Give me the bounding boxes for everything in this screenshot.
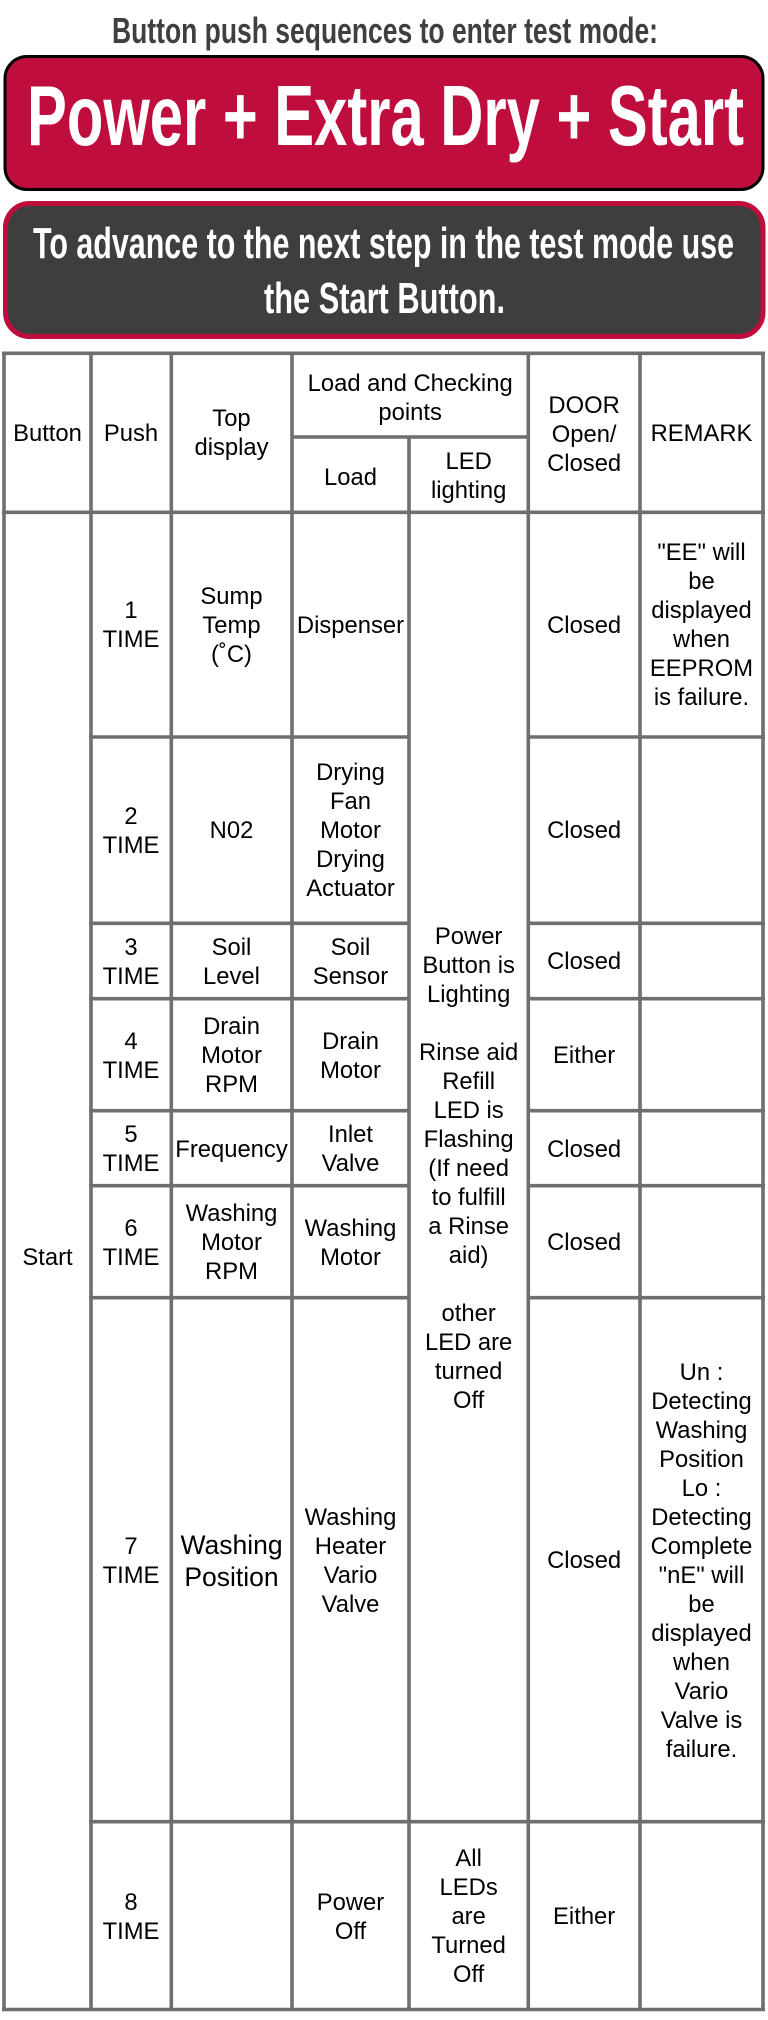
remark 7: Washing bbox=[656, 1416, 747, 1444]
load 7: Heater bbox=[315, 1532, 386, 1560]
top display 4: Motor bbox=[201, 1042, 262, 1069]
led lighting cell: steps 1 to 7: aid) bbox=[449, 1242, 488, 1269]
remark 7: Valve is bbox=[661, 1706, 742, 1734]
led lighting 8 bbox=[431, 1845, 506, 1988]
load 2: Fan bbox=[330, 788, 371, 815]
load 8: Power bbox=[317, 1888, 384, 1916]
load 6: Motor bbox=[320, 1244, 381, 1270]
load 2: Drying bbox=[316, 846, 385, 873]
led lighting 8: Off bbox=[453, 1961, 484, 1988]
remark 7: when bbox=[673, 1648, 730, 1676]
row 5 bbox=[103, 1121, 621, 1177]
led lighting 8: are bbox=[451, 1903, 486, 1930]
remark 1: is failure. bbox=[654, 684, 749, 711]
push 6: TIME bbox=[103, 1244, 159, 1270]
led lighting cell: steps 1 to 7 bbox=[419, 923, 518, 1414]
load 5 bbox=[322, 1121, 379, 1177]
row 6 bbox=[103, 1200, 621, 1285]
push 4: TIME bbox=[103, 1056, 159, 1084]
remark 7: Un : bbox=[680, 1358, 723, 1386]
led lighting cell: steps 1 to 7: (If need bbox=[428, 1155, 509, 1182]
led lighting 8: LEDs bbox=[440, 1874, 498, 1901]
header: door open/closed: Closed bbox=[547, 450, 621, 476]
push 3 bbox=[103, 934, 159, 990]
button cell: start: Start bbox=[22, 1244, 73, 1271]
header: door open/closed: Open/ bbox=[552, 420, 617, 448]
header: top display: Top bbox=[212, 405, 251, 432]
load 2 bbox=[306, 759, 395, 902]
header: top display: display bbox=[194, 434, 269, 461]
push 2 bbox=[103, 802, 159, 858]
top display 4: RPM bbox=[205, 1071, 258, 1098]
load 1: Dispenser bbox=[297, 612, 404, 638]
header: led lighting: LED bbox=[446, 448, 492, 475]
push 3: TIME bbox=[103, 962, 159, 990]
remark 1: be bbox=[688, 568, 715, 595]
door 4: Either bbox=[553, 1042, 615, 1069]
led lighting cell: steps 1 to 7: Rinse aid bbox=[419, 1039, 518, 1066]
remark 7: "nE" will bbox=[659, 1562, 744, 1588]
remark 7: Detecting bbox=[651, 1388, 752, 1414]
header: load and checking points: points bbox=[378, 398, 442, 426]
row 3 bbox=[103, 934, 621, 990]
led lighting 8: Turned bbox=[431, 1932, 506, 1959]
header: remark: REMARK bbox=[651, 420, 752, 446]
push 6 bbox=[103, 1214, 159, 1270]
led lighting 8: All bbox=[455, 1845, 482, 1872]
push 1 bbox=[103, 597, 159, 653]
remark 1 bbox=[650, 539, 753, 711]
push 7 bbox=[103, 1532, 159, 1588]
row 8 bbox=[103, 1845, 615, 1988]
push 5: TIME bbox=[103, 1150, 159, 1177]
remark 1: displayed bbox=[651, 597, 752, 624]
top display 4: Drain bbox=[203, 1013, 260, 1040]
top display 1: (˚C) bbox=[211, 640, 252, 668]
top display 6: RPM bbox=[205, 1258, 258, 1285]
remark 7: displayed bbox=[651, 1620, 752, 1646]
led lighting cell: steps 1 to 7: Power bbox=[435, 923, 502, 950]
top display 7: Position bbox=[184, 1562, 279, 1592]
load 8 bbox=[317, 1888, 384, 1944]
header: door open/closed bbox=[547, 392, 621, 476]
door 1: Closed bbox=[547, 612, 621, 638]
led lighting cell: steps 1 to 7: other bbox=[442, 1300, 496, 1327]
top display 7: Washing bbox=[180, 1530, 283, 1560]
header: led lighting: lighting bbox=[431, 477, 506, 504]
banner: power + extra dry + start bbox=[5, 56, 763, 190]
door 3: Closed bbox=[547, 948, 621, 975]
remark 1: EEPROM bbox=[650, 655, 753, 682]
led lighting cell: steps 1 to 7: Off bbox=[453, 1387, 484, 1414]
top display 2: N02 bbox=[210, 817, 253, 844]
remark 1: when bbox=[673, 626, 730, 653]
push 1: 1 bbox=[124, 597, 138, 624]
remark 7: Complete bbox=[651, 1532, 752, 1560]
remark 7: Detecting bbox=[651, 1504, 752, 1530]
load 6: Washing bbox=[305, 1214, 396, 1242]
header: button: Button bbox=[13, 420, 82, 446]
remark 7 bbox=[651, 1358, 752, 1762]
load 5: Inlet bbox=[328, 1121, 373, 1148]
led lighting cell: steps 1 to 7: Button is bbox=[422, 952, 515, 979]
push 2: TIME bbox=[103, 832, 159, 858]
load 2: Motor bbox=[320, 817, 381, 844]
remark 7: be bbox=[688, 1590, 715, 1618]
row 1 bbox=[103, 539, 753, 711]
door 7: Closed bbox=[547, 1547, 621, 1574]
load 4: Drain bbox=[322, 1028, 379, 1054]
header: door open/closed: DOOR bbox=[548, 392, 620, 418]
top display 1: Sump bbox=[200, 582, 263, 610]
top display 7 bbox=[180, 1530, 283, 1592]
top display 6 bbox=[186, 1200, 277, 1285]
load 6 bbox=[304, 1214, 396, 1270]
header: push: Push bbox=[104, 420, 158, 446]
push 6: 6 bbox=[124, 1214, 138, 1242]
led lighting cell: steps 1 to 7: Refill bbox=[442, 1068, 495, 1095]
push 5: 5 bbox=[124, 1121, 138, 1148]
banner: advance instruction: the Start Button. bbox=[264, 274, 505, 323]
top display 3: Level bbox=[203, 962, 260, 990]
door 6: Closed bbox=[547, 1229, 621, 1256]
load 4 bbox=[320, 1028, 381, 1084]
row 2 bbox=[103, 759, 621, 902]
push 8: 8 bbox=[124, 1888, 138, 1916]
load 5: Valve bbox=[322, 1150, 379, 1177]
push 4 bbox=[103, 1028, 159, 1084]
remark 7: failure. bbox=[666, 1736, 737, 1762]
led lighting cell: steps 1 to 7: LED are bbox=[425, 1329, 512, 1356]
banner: advance instruction bbox=[6, 204, 763, 336]
top display 3 bbox=[203, 934, 260, 990]
header: top display bbox=[194, 405, 269, 461]
led lighting cell: steps 1 to 7: Flashing bbox=[424, 1126, 514, 1153]
door 2: Closed bbox=[547, 817, 621, 844]
push 2: 2 bbox=[124, 802, 138, 830]
header: load and checking points bbox=[308, 370, 513, 426]
top display 5: Frequency bbox=[175, 1136, 288, 1162]
load 7: Valve bbox=[322, 1590, 379, 1618]
led lighting cell: steps 1 to 7: to fulfill bbox=[432, 1184, 506, 1211]
header: load: Load bbox=[324, 464, 377, 490]
load 7: Vario bbox=[324, 1562, 377, 1588]
load 8: Off bbox=[335, 1918, 366, 1944]
load 3 bbox=[313, 934, 388, 990]
load 2: Actuator bbox=[306, 875, 395, 902]
push 8 bbox=[103, 1888, 159, 1944]
led lighting cell: steps 1 to 7: LED is bbox=[434, 1097, 504, 1124]
top display 1: Temp bbox=[202, 612, 261, 638]
led lighting cell: steps 1 to 7: Lighting bbox=[427, 981, 510, 1008]
push 4: 4 bbox=[124, 1028, 138, 1054]
row 7 bbox=[103, 1358, 752, 1762]
top display 6: Washing bbox=[186, 1200, 277, 1227]
load 7: Washing bbox=[305, 1504, 396, 1530]
top display 1 bbox=[200, 582, 263, 668]
push 7: 7 bbox=[124, 1532, 138, 1560]
push 3: 3 bbox=[124, 934, 138, 960]
led lighting cell: steps 1 to 7: a Rinse bbox=[428, 1213, 509, 1240]
remark 1: "EE" will bbox=[657, 539, 746, 566]
remark 7: Lo : bbox=[682, 1474, 721, 1502]
row 4 bbox=[103, 1013, 615, 1098]
top display 3: Soil bbox=[212, 934, 251, 960]
push 8: TIME bbox=[103, 1918, 159, 1944]
top display 4 bbox=[201, 1013, 262, 1098]
push 5 bbox=[103, 1121, 159, 1177]
remark 7: Vario bbox=[675, 1678, 728, 1704]
load 3: Soil bbox=[331, 934, 370, 960]
load 3: Sensor bbox=[313, 962, 388, 990]
door 8: Either bbox=[553, 1903, 615, 1930]
load 4: Motor bbox=[320, 1056, 381, 1084]
header: load and checking points: Load and Checking bbox=[308, 370, 513, 396]
top display 6: Motor bbox=[201, 1229, 262, 1256]
push 1: TIME bbox=[103, 626, 159, 653]
door 5: Closed bbox=[547, 1136, 621, 1162]
load 7 bbox=[304, 1504, 396, 1618]
header: led lighting bbox=[431, 448, 506, 504]
load 2: Drying bbox=[316, 759, 385, 786]
led lighting cell: steps 1 to 7: turned bbox=[435, 1358, 502, 1385]
push 7: TIME bbox=[103, 1562, 159, 1588]
remark 7: Position bbox=[659, 1446, 744, 1472]
